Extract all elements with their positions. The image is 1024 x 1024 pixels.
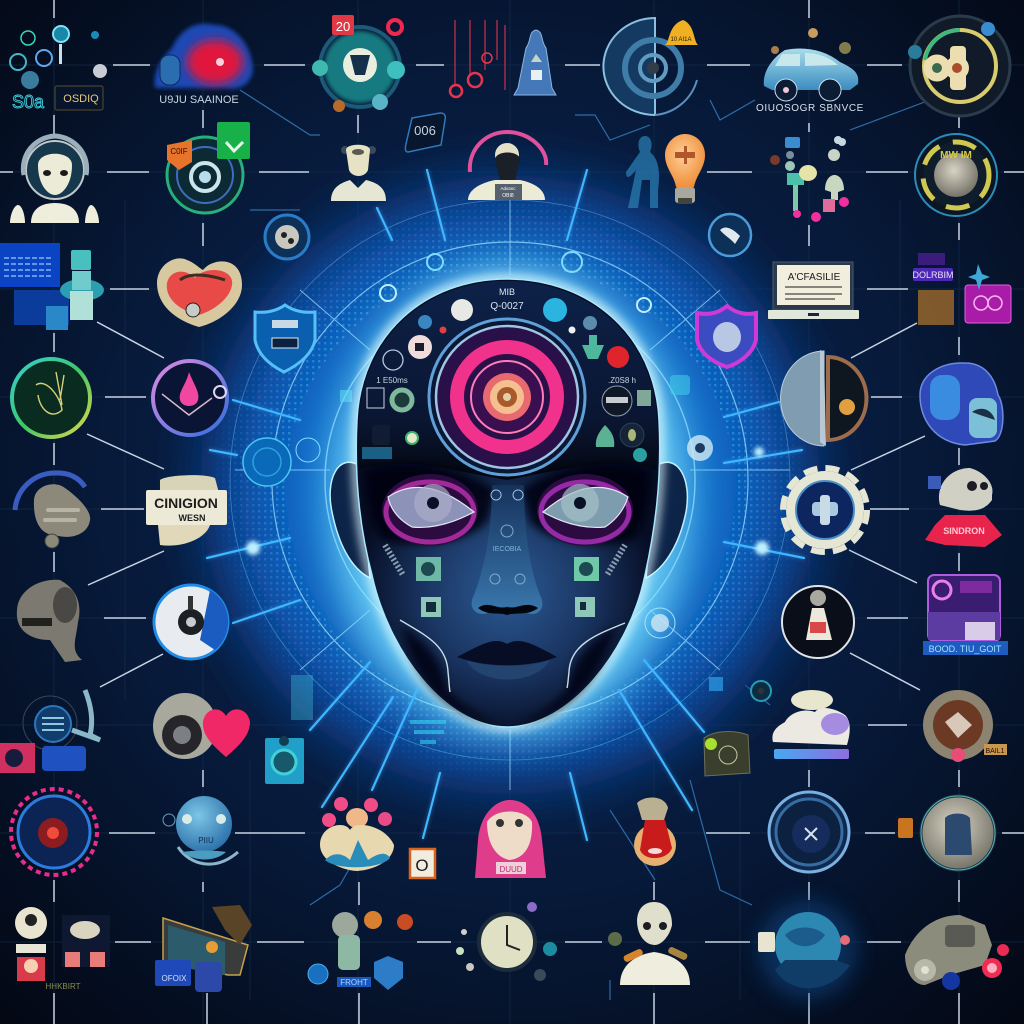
icon: people group (320, 797, 394, 871)
nose: IECOBIA (493, 546, 522, 553)
icon: robot head with headphones (10, 136, 99, 223)
icon: pink drop circle (153, 361, 227, 435)
icon: purple neon device: DOLRBIM (912, 270, 954, 280)
disc nodes and small rings (243, 252, 769, 742)
icon: grey machine with red lights (905, 915, 1009, 990)
icon: green dial with shield and check (167, 122, 250, 213)
icon: red neon pipes (450, 20, 505, 97)
icon: O box: O (415, 856, 429, 875)
icon: small top-right ring (709, 214, 751, 256)
icon: cream gear (783, 468, 867, 552)
icon: cream person (331, 145, 386, 201)
icon: red heart gadget (157, 258, 242, 327)
icon: blue figure and light bulb (626, 134, 705, 208)
icon: car with service label: OIUOSOGR SBNVCE (756, 103, 864, 114)
icon: half sphere (781, 350, 866, 446)
icon: blue capsule (920, 363, 1003, 445)
head (330, 279, 687, 727)
dark sides of the face (364, 464, 650, 724)
icon: O box (410, 849, 435, 878)
icon: small round dark ring (751, 681, 771, 701)
icon cluster: portrait and charts: HHKBIRT (46, 982, 81, 991)
icon: 006 speech box: 006 (414, 123, 436, 138)
icon: person with pink arch: OBI8 (502, 193, 514, 199)
icon: brain with red core (155, 24, 253, 106)
cheek chips (385, 545, 625, 617)
icon: person with pink arch (468, 132, 546, 200)
right eye (537, 474, 633, 546)
icon: person with pink arch: Advanc (500, 186, 516, 191)
icon: rainbow gear circle (908, 16, 1010, 116)
forehead panel (358, 281, 658, 480)
forehead icons: 1 E50ms (376, 376, 408, 385)
icon: orange tag and silver coin (898, 796, 995, 870)
icon: laptop (768, 262, 859, 319)
icon: black badge with figure (782, 586, 854, 658)
icon: purple neon device (912, 253, 1011, 325)
blue radial disc (158, 146, 862, 824)
forehead target (429, 319, 585, 475)
forehead icons: MIB (499, 287, 515, 297)
icon: cloud stack (772, 690, 850, 759)
icon: teal gear: 20 (336, 19, 350, 34)
icon: olive tag with green dot (704, 732, 750, 776)
icon cluster: portrait and charts (15, 907, 110, 991)
icon: brain with red core: U9JU SAAINOE (159, 94, 239, 106)
icon: gear and pink heart (153, 693, 250, 759)
forehead icons: Q-0027 (490, 301, 524, 312)
icon cluster: astronaut and badges (308, 911, 413, 990)
icon: cream badge with text (146, 475, 227, 546)
icon: gold lettered ring with silver ball (915, 134, 997, 216)
icon: store with blue badges (155, 905, 252, 992)
icon: pink hooded woman (475, 800, 546, 878)
icon: cream badge with text: WESN (178, 513, 206, 523)
left eye (382, 474, 478, 546)
face shape (356, 279, 660, 727)
forehead icons: .Z0S8 h (608, 376, 636, 385)
icon: brown ring with tag (923, 690, 1007, 762)
icon: cream badge with text: CINIGION (154, 495, 218, 511)
icon: purple device: BOOD. TIU_GOIT (929, 644, 1002, 654)
icon: teal gear (312, 15, 405, 112)
icon: blue robot head: PIIU (198, 836, 214, 845)
icon: blue shield (255, 305, 315, 372)
icon: small ring with dots (265, 215, 309, 259)
icon: purple device (923, 575, 1008, 655)
icon: rainbow circle (12, 359, 90, 437)
icon: brown ring with tag: BAIL1 (985, 748, 1005, 755)
icon: purple shield (697, 306, 756, 367)
icon: mascot with red banner (925, 468, 1002, 547)
ears (330, 462, 687, 578)
icon: blue speaker box (265, 736, 304, 784)
icon cluster: presenters and pink dots (770, 136, 849, 222)
icon: blue screen with teal stack (0, 243, 104, 330)
icon: half dial and yellow bell: 10 AI1A (670, 37, 692, 43)
icon: 006 speech box (405, 113, 445, 152)
icon: red flask (634, 798, 676, 866)
icon: pink hooded woman: DUUD (499, 865, 523, 874)
head glow outline (356, 279, 660, 727)
radial streak lines (207, 170, 804, 840)
icon: grey head (15, 473, 90, 548)
icon: dark navigation dial (769, 792, 849, 872)
icon: mascot with red banner: SINDRON (943, 526, 985, 536)
icon: blue bottle (514, 30, 556, 95)
icon: magnifier cluster (0, 690, 100, 773)
lips (457, 641, 557, 680)
icon: laptop: A'CFASILIE (788, 272, 841, 283)
icon: half dial and yellow bell (603, 18, 698, 115)
icon: blue globe (758, 900, 858, 1000)
icon: clock with dots (456, 902, 557, 981)
icon: blue white circle (154, 585, 228, 659)
icon: blue robot head (163, 796, 238, 864)
icon cluster: top left bubbles (10, 26, 107, 112)
jaw lines (400, 620, 625, 692)
nose (472, 485, 542, 615)
icon: skull with headset (17, 580, 82, 662)
icon cluster: astronaut and badges: FROHT (340, 978, 368, 987)
icon: red core dial (11, 789, 97, 875)
icon: store with blue badges: OFOIX (162, 974, 187, 983)
icon cluster: top left bubbles: OSDIQ (63, 93, 99, 105)
icon: green dial with shield and check: C0IF (170, 147, 188, 156)
forehead icons (362, 287, 651, 462)
icon: car with service label (756, 28, 864, 114)
icon: cream person with white suit (608, 902, 690, 985)
icon: gold lettered ring with silver ball: MW ΙM (940, 150, 972, 161)
radial streak glow (207, 170, 804, 840)
icon cluster: top left bubbles: S0a (12, 92, 45, 112)
